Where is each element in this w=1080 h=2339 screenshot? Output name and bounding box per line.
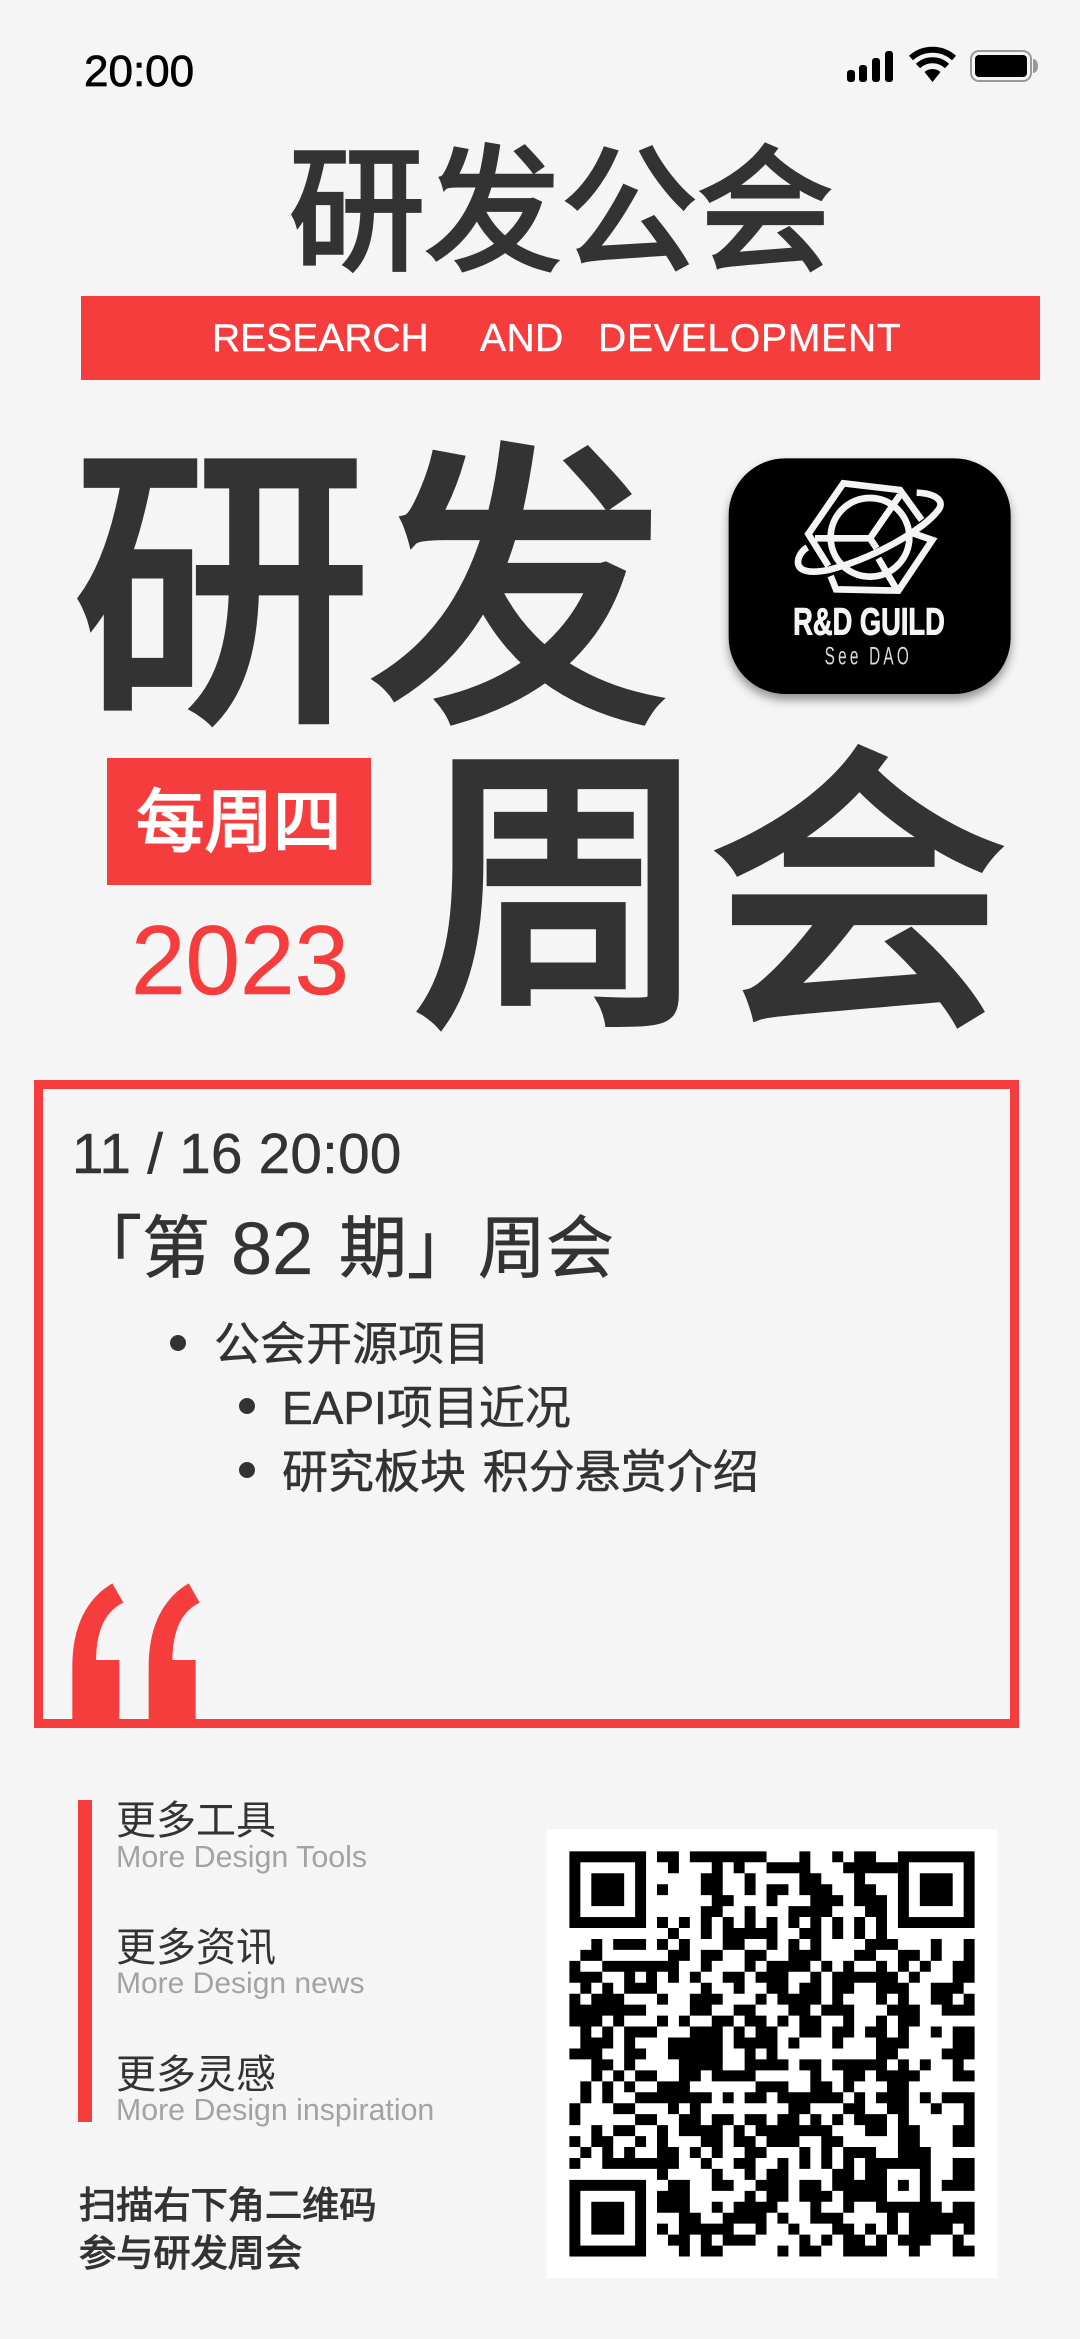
subtitle word: and: AND [480,317,564,360]
link title: 更多资讯 [116,1926,276,1970]
status icons: signal, wifi, battery [847,46,1038,82]
bullet dot [170,1335,186,1351]
link subtitle: More Design Tools [116,1840,367,1874]
issue opening: 「第 [74,1211,210,1287]
title: 研发公会 [289,136,833,288]
scan instruction [79,2184,377,2274]
issue closing: 期」 [339,1211,475,1287]
sub-bullet: 研究板块 积分悬赏介绍 [239,1446,759,1498]
weekday tag [107,758,371,885]
link subtitle: More Design news [116,1967,364,2000]
bullet text: 研究板块 积分悬赏介绍 [282,1446,759,1498]
QR code [547,1829,997,2278]
meeting date and time: 11 / 16 20:00 [72,1122,402,1185]
subtitle word: research: RESEARCH [212,317,429,360]
issue meeting name: 周会 [478,1211,614,1287]
status bar [84,46,1038,96]
accent bar [78,1800,92,2122]
link title: 更多工具 [116,1799,276,1843]
bullet: 公会开源项目 [170,1318,490,1370]
links list [78,1799,434,2127]
bullet dot [239,1462,255,1478]
bullet text: 公会开源项目 [214,1318,490,1370]
logo badge: R&D Guild [722,458,1017,706]
status time: 20:00 [84,47,194,96]
bullet dot [239,1398,255,1414]
link title: 更多灵感 [116,2053,276,2097]
logo badge: R&D Guild: See DAO [825,643,912,671]
weekday text: 每周四 [136,784,342,861]
meeting issue heading [74,1207,614,1290]
big heading: 周会: 周会 [413,730,1007,1062]
link: inspiration [116,2053,434,2127]
subtitle banner [81,296,1040,380]
bullet text: EAPI项目近况 [282,1382,571,1434]
issue number: 82 [231,1207,313,1290]
logo badge: R&D Guild: R&D GUILD [793,601,945,643]
instruction line 2: 参与研发周会 [79,2232,302,2274]
panel: meeting agenda [34,1080,1019,1728]
link subtitle: More Design inspiration [116,2094,434,2127]
instruction line 1: 扫描右下角二维码 [79,2184,377,2226]
sub-bullet: EAPI项目近况 [239,1382,571,1434]
year: 2023 [131,905,349,1015]
icon: quotation mark [72,1583,200,1719]
link: news [116,1926,364,2000]
subtitle word: development: DEVELOPMENT [598,317,902,360]
link: tools [116,1799,367,1874]
big heading: 研发: 研发 [73,427,667,759]
